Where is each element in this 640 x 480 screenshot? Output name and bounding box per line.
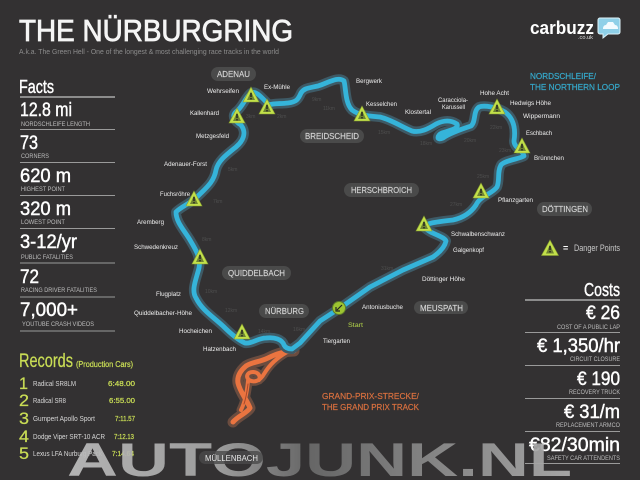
record 5 xyxy=(19,444,134,463)
distance markers: 15km xyxy=(378,130,390,136)
record 2: 6:55.00 xyxy=(109,396,135,405)
panel: records xyxy=(19,351,135,463)
chart: track map xyxy=(67,67,620,480)
corner names: Karussell xyxy=(442,104,465,111)
fact: corners: CORNERS xyxy=(21,154,49,160)
corner names: Ex-Mühle xyxy=(264,84,290,91)
distance markers: 20km xyxy=(464,138,476,144)
distance markers: 14km xyxy=(258,329,270,335)
start marker: Start xyxy=(348,322,363,329)
label: Nordschleife xyxy=(530,71,620,92)
town: Herschbroich: HERSCHBROICH xyxy=(351,185,412,195)
corner names: Antoniusbuche xyxy=(362,304,403,311)
fact: length: NORDSCHLEIFE LENGTH xyxy=(21,122,90,128)
cost: safety car attendants: SAFETY CAR ATTENDENTS xyxy=(547,456,620,462)
record 3: 3 xyxy=(19,409,29,428)
town: Adenau: ADENAU xyxy=(217,69,250,79)
logo: carbuzz: carbuzz xyxy=(530,18,594,38)
record 1: 1 xyxy=(19,374,28,393)
town: Döttingen: DÖTTINGEN xyxy=(542,204,588,214)
label: Grand Prix track: THE GRAND PRIX TRACK xyxy=(322,402,419,412)
cost: recovery truck: RECOVERY TRUCK xyxy=(569,390,620,396)
record 4: 7:12.13 xyxy=(114,432,134,441)
cost: replacement armco: REPLACEMENT ARMCO xyxy=(556,423,620,429)
distance markers: 18km xyxy=(420,141,432,147)
record 1: 6:48.00 xyxy=(108,379,135,388)
track: grand prix circuit xyxy=(233,351,294,422)
record 4 xyxy=(19,427,134,446)
corner names: Tiergarten xyxy=(323,338,350,345)
heading: facts: Facts xyxy=(19,77,54,97)
track: nordschleife xyxy=(176,79,524,349)
distance markers: 11km xyxy=(323,106,335,112)
distance markers: 23km xyxy=(499,148,511,154)
fact: corners: 73 xyxy=(20,133,38,154)
record 3: 7:11.57 xyxy=(115,414,135,423)
legend: danger points xyxy=(542,240,620,256)
heading: records xyxy=(19,351,133,372)
cost: circuit closure: € 1,350/hr xyxy=(537,336,621,357)
corner names: Pflanzgarten xyxy=(498,197,533,204)
heading: records: (Production Cars) xyxy=(76,360,133,369)
corner names: Döttinger Höhe xyxy=(422,276,465,283)
fact: corners xyxy=(20,133,49,160)
corner names: Caracciola- xyxy=(438,97,468,104)
corner names: Klostertal xyxy=(405,109,432,116)
corner names: Eschbach xyxy=(526,130,552,137)
corner names: Aremberg xyxy=(137,219,164,226)
label: Nordschleife: THE NORTHERN LOOP xyxy=(530,82,620,92)
distance markers xyxy=(202,97,511,335)
town: Müllenbach: MÜLLENBACH xyxy=(205,453,258,463)
distance markers: 22km xyxy=(490,125,502,131)
corner names: Kallenhard xyxy=(190,110,219,117)
fact: public fatalities: 3-12/yr xyxy=(20,232,78,253)
town: Meuspath xyxy=(414,301,468,314)
distance markers: 12km xyxy=(225,308,237,314)
corner names: Adenauer-Forst xyxy=(164,161,207,168)
record 5: Lexus LFA Nurburg Pack xyxy=(33,451,102,458)
record 1 xyxy=(19,374,135,393)
cost: recovery truck: € 190 xyxy=(577,369,620,390)
corner names: Metzgesfeld xyxy=(196,133,229,140)
corner names: Brünnchen xyxy=(534,155,564,162)
record 4: 4 xyxy=(19,427,29,446)
record 3 xyxy=(19,409,135,428)
record 3: Gumpert Apollo Sport xyxy=(33,416,95,423)
corner names: Schwedenkreuz xyxy=(134,244,178,251)
distance markers: 9km xyxy=(312,97,321,103)
corner names: Wippermann xyxy=(523,113,560,120)
cost: safety car attendants: €82/30min xyxy=(529,435,620,456)
distance markers: 8km xyxy=(202,237,211,243)
legend: danger points: = xyxy=(563,243,568,253)
corner names: Kesselchen xyxy=(366,101,397,108)
cost: public lap: COST OF A PUBLIC LAP xyxy=(557,325,620,331)
logo: carbuzz xyxy=(530,18,620,41)
record 2 xyxy=(19,391,135,410)
title: THE NÜRBURGRING xyxy=(19,13,293,48)
cost: public lap: € 26 xyxy=(586,303,620,324)
fact: crash videos: YOUTUBE CRASH VIDEOS xyxy=(22,322,94,328)
danger triangles xyxy=(186,87,530,339)
corner names: Hocheichen xyxy=(179,328,212,335)
town: Quiddelbach: QUIDDELBACH xyxy=(228,268,285,278)
distance markers: 16km xyxy=(293,327,305,333)
fact: lowest point: LOWEST POINT xyxy=(21,220,65,226)
distance markers: 25km xyxy=(477,174,489,180)
town: Quiddelbach xyxy=(222,266,291,280)
fact: highest point: HIGHEST POINT xyxy=(21,187,65,193)
cost: replacement armco: € 31/m xyxy=(564,402,620,423)
town: Nürburg: NÜRBURG xyxy=(265,306,304,316)
distance markers: 7km xyxy=(213,199,222,205)
corner names: Galgenkopf xyxy=(453,247,484,254)
town: Breidscheid xyxy=(300,129,364,143)
start marker xyxy=(332,302,363,329)
town: Meuspath: MEUSPATH xyxy=(420,303,463,313)
legend: danger points: Danger Points xyxy=(574,243,620,253)
town: Adenau xyxy=(211,67,256,81)
corner names: Quiddelbacher-Höhe xyxy=(134,310,192,317)
corner names: Schwalbenschwanz xyxy=(451,231,505,238)
record 2: 2 xyxy=(19,391,29,410)
corner names: Hatzenbach xyxy=(203,346,236,353)
town: Döttingen xyxy=(537,202,592,216)
record 4: Dodge Viper SRT-10 ACR xyxy=(33,434,105,441)
cost: recovery truck xyxy=(569,369,620,396)
corner names: Flugplatz xyxy=(156,291,181,298)
fact: crash videos xyxy=(20,300,94,328)
distance markers: 27km xyxy=(450,202,462,208)
logo: carbuzz: .co.uk xyxy=(578,35,594,41)
label: Nordschleife: NORDSCHLEIFE/ xyxy=(530,71,597,81)
record 5: 7:14.64 xyxy=(112,449,134,458)
town: Nürburg xyxy=(259,304,309,318)
distance markers: 3km xyxy=(246,114,255,120)
record 2: Radical SR8 xyxy=(33,398,66,405)
record 1: Radical SR8LM xyxy=(33,381,76,388)
corner names: Wehrseifen xyxy=(207,88,239,95)
corner names: Fuchsröhre xyxy=(160,191,190,198)
label: Grand Prix track: GRAND-PRIX-STRECKE/ xyxy=(322,391,420,401)
town labels xyxy=(134,67,620,412)
fact: lowest point: 320 m xyxy=(20,199,71,220)
fact: racing driver fatalities xyxy=(20,267,97,294)
panel: facts xyxy=(19,77,115,331)
corner names xyxy=(134,78,564,353)
subtitle: A.k.a. The Green Hell - One of the longest & most challenging race tracks in the world xyxy=(19,47,279,56)
label: Grand Prix track xyxy=(322,391,420,412)
record 5: 5 xyxy=(19,444,29,463)
fact: length: 12.8 mi xyxy=(20,100,72,121)
fact: public fatalities: PUBLIC FATALITIES xyxy=(21,255,73,261)
distance markers: 31km xyxy=(381,266,393,272)
corner names: Bergwerk xyxy=(356,78,383,85)
town: Müllenbach xyxy=(199,451,263,464)
cost: replacement armco xyxy=(556,402,620,429)
corner names: Hedwigs Höhe xyxy=(510,100,551,107)
town: Breidscheid: BREIDSCHEID xyxy=(305,131,359,141)
cost: public lap xyxy=(557,303,620,331)
heading: costs: Costs xyxy=(584,280,620,300)
panel: costs xyxy=(525,280,621,464)
distance markers: 2km xyxy=(277,114,286,120)
fact: racing driver fatalities: RACING DRIVER FATALITIES xyxy=(21,288,97,294)
heading: records: Records xyxy=(19,351,73,372)
fact: crash videos: 7,000+ xyxy=(20,300,78,321)
cost: circuit closure: CIRCUIT CLOSURE xyxy=(570,357,620,363)
distance markers: 10km xyxy=(205,289,217,295)
distance markers: 5km xyxy=(228,167,237,173)
fact: length xyxy=(20,100,90,128)
fact: racing driver fatalities: 72 xyxy=(20,267,39,288)
fact: highest point: 620 m xyxy=(20,166,71,187)
town: Herschbroich xyxy=(344,183,419,197)
corner names: Hohe Acht xyxy=(480,90,509,97)
